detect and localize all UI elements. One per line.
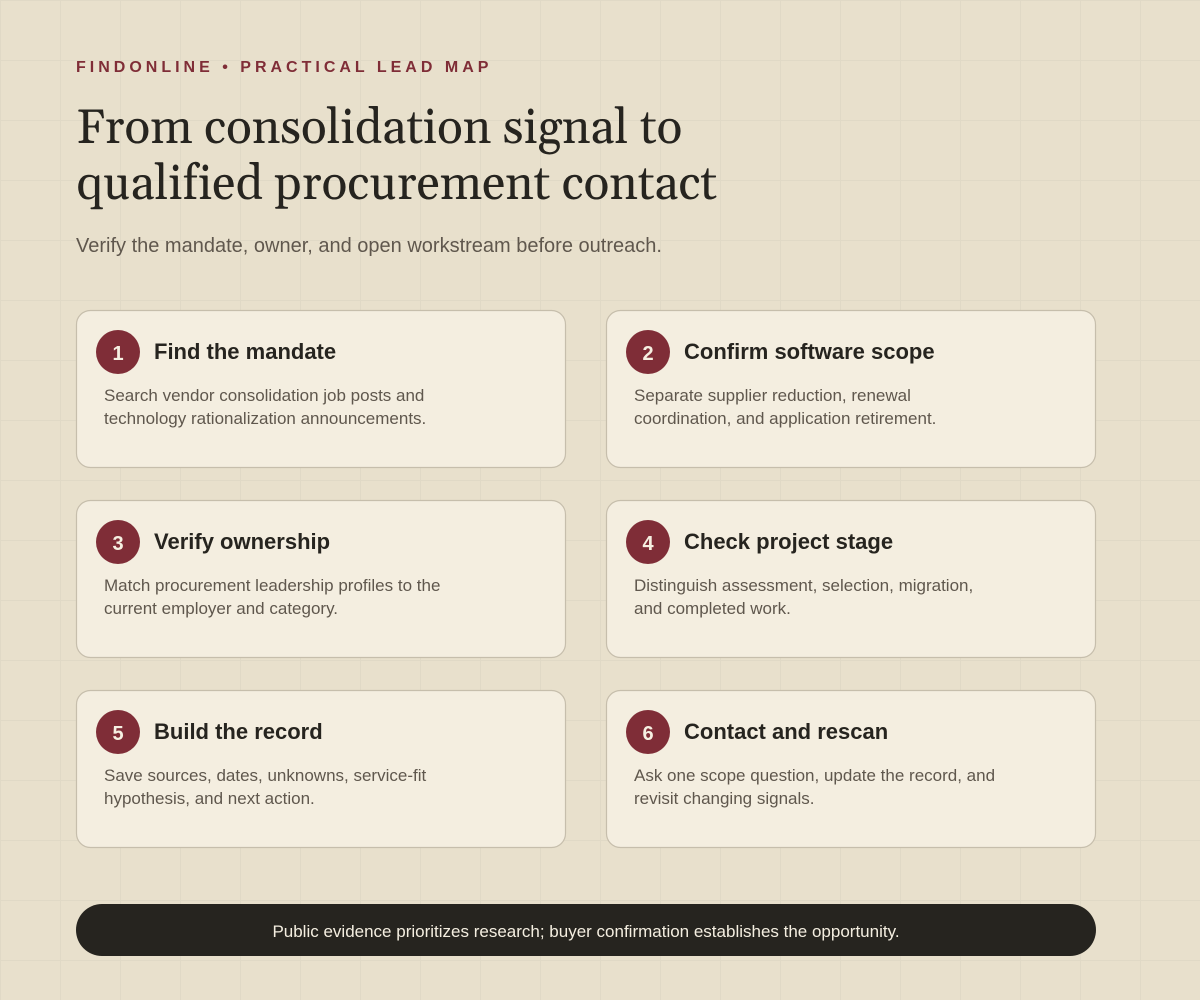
panel: step 4 (606, 500, 1096, 658)
icon: number 3 (96, 520, 140, 564)
footer banner (76, 904, 1096, 956)
panel: step 6 (606, 690, 1096, 848)
text: step 3: current employer and category. (104, 599, 338, 618)
icon: number 1 (96, 330, 140, 374)
text: step 5: Save sources, dates, unknowns, service-fit (104, 766, 426, 785)
text: step 3: Match procurement leadership profiles to the (104, 576, 440, 595)
heading: step 2: Confirm software scope (684, 339, 935, 364)
title: qualified procurement contact (76, 155, 717, 216)
icon: number 5: 5 (112, 723, 124, 745)
text: step 1: Search vendor consolidation job posts and (104, 386, 424, 405)
icon: number 3: 3 (112, 533, 124, 555)
icon: number 1: 1 (112, 343, 124, 365)
eyebrow: FINDONLINE • PRACTICAL LEAD MAP (76, 59, 492, 76)
heading: step 6: Contact and rescan (684, 719, 888, 744)
footer banner: Public evidence prioritizes research; buyer confirmation establishes the opportunity. (272, 922, 900, 941)
icon: number 5 (96, 710, 140, 754)
text: step 6: revisit changing signals. (634, 789, 814, 808)
panel: step 1 (76, 310, 566, 468)
icon: number 4 (626, 520, 670, 564)
heading: step 1: Find the mandate (154, 339, 336, 364)
panel: step 5 (76, 690, 566, 848)
heading: step 4: Check project stage (684, 529, 893, 554)
text: step 6: Ask one scope question, update the record, and (634, 766, 995, 785)
text: step 4: and completed work. (634, 599, 791, 618)
text: step 5: hypothesis, and next action. (104, 789, 315, 808)
panel: step 3 (76, 500, 566, 658)
heading: step 3: Verify ownership (154, 529, 330, 554)
icon: number 6: 6 (642, 723, 654, 745)
text: step 2: Separate supplier reduction, renewal (634, 386, 911, 405)
title: From consolidation signal to (76, 99, 682, 160)
subtitle: Verify the mandate, owner, and open workstream before outreach. (76, 235, 662, 257)
icon: number 6 (626, 710, 670, 754)
text: step 2: coordination, and application retirement. (634, 409, 936, 428)
text: step 4: Distinguish assessment, selection, migration, (634, 576, 973, 595)
icon: number 4: 4 (642, 533, 654, 555)
icon: number 2 (626, 330, 670, 374)
panel: step 2 (606, 310, 1096, 468)
heading: step 5: Build the record (154, 719, 323, 744)
text: step 1: technology rationalization announcements. (104, 409, 426, 428)
icon: number 2: 2 (642, 343, 654, 365)
